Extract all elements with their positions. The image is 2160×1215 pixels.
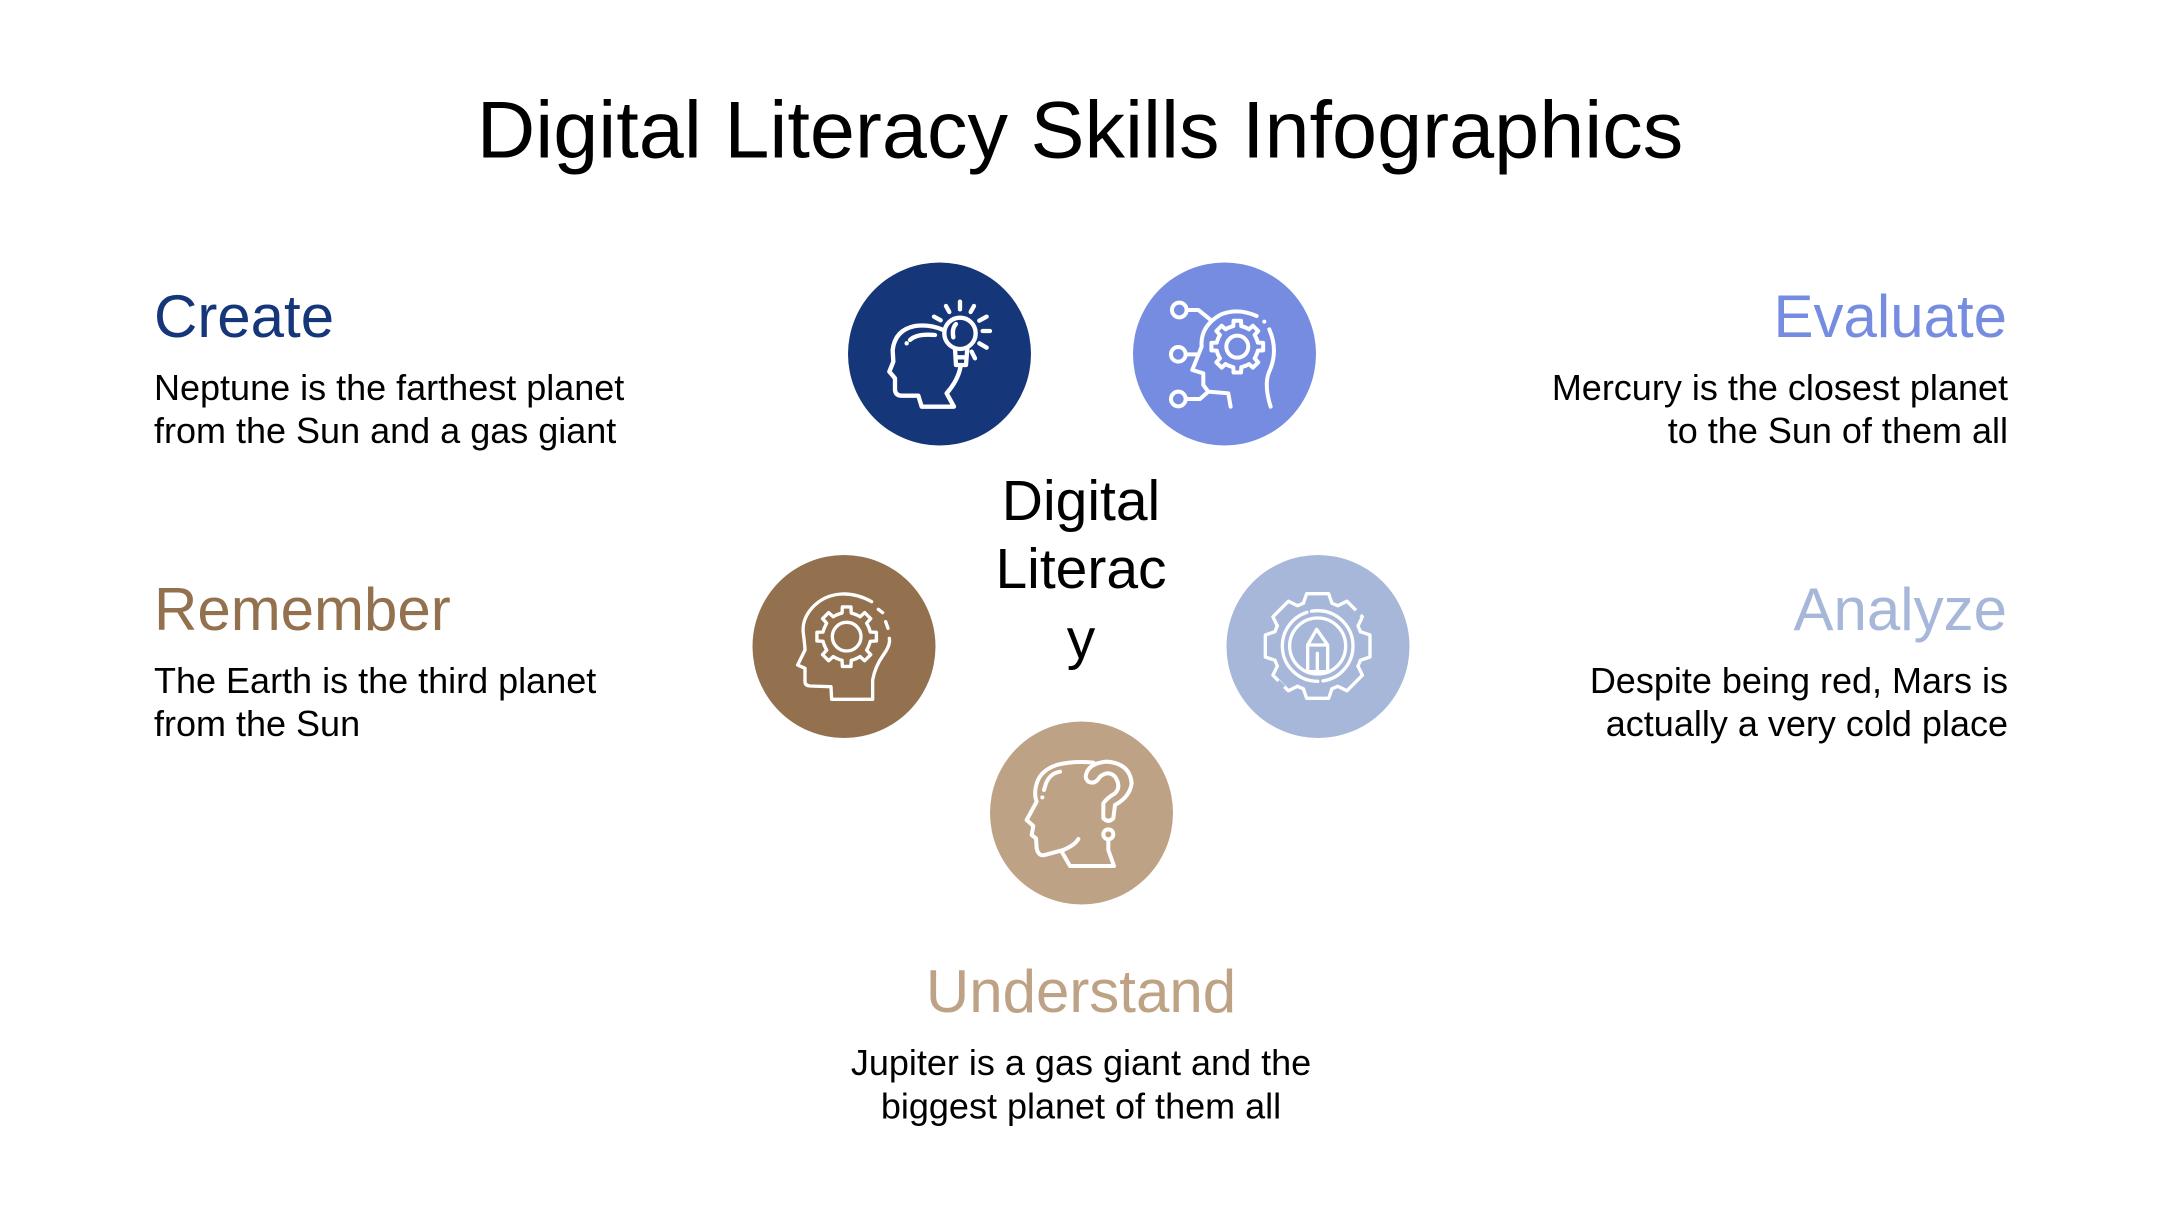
panel: remember text: The Earth is the third planet bbox=[154, 660, 596, 701]
panel: analyze text: actually a very cold place bbox=[1606, 703, 2008, 744]
panel: create text: Neptune is the farthest planet bbox=[154, 367, 624, 408]
icon: create, head with light bulb bbox=[848, 262, 1031, 446]
panel: create text: Create bbox=[154, 283, 334, 350]
panel: understand text: Understand bbox=[926, 958, 1236, 1025]
panel: evaluate text: Evaluate bbox=[1774, 283, 2007, 350]
panel: create text bbox=[154, 283, 624, 451]
panel: create text: from the Sun and a gas giant bbox=[154, 410, 616, 451]
panel: evaluate text: to the Sun of them all bbox=[1668, 410, 2008, 451]
panel: remember text bbox=[154, 576, 596, 744]
center label: y bbox=[1067, 607, 1096, 671]
panel: analyze text bbox=[1590, 576, 2008, 744]
icon: evaluate, head with gear and circuits bbox=[1133, 262, 1316, 446]
icon: analyze, gear with pencil bbox=[1226, 555, 1410, 738]
panel: analyze text: Despite being red, Mars is bbox=[1590, 660, 2008, 701]
title: Digital Literacy Skills Infographics bbox=[477, 86, 1683, 176]
panel: remember text: Remember bbox=[154, 576, 451, 643]
panel: remember text: from the Sun bbox=[154, 703, 360, 744]
panel: evaluate text bbox=[1552, 283, 2008, 451]
icon: remember, head with gear bbox=[752, 555, 936, 738]
panel: understand text bbox=[851, 958, 1311, 1126]
center label: Digital bbox=[1002, 469, 1160, 533]
panel: evaluate text: Mercury is the closest planet bbox=[1552, 367, 2008, 408]
panel: understand text: biggest planet of them all bbox=[881, 1086, 1281, 1126]
icon: understand, head with question mark bbox=[990, 722, 1173, 904]
panel: understand text: Jupiter is a gas giant and the bbox=[851, 1042, 1311, 1083]
center label: Literac bbox=[995, 537, 1167, 601]
center label bbox=[995, 469, 1167, 671]
panel: analyze text: Analyze bbox=[1794, 576, 2007, 643]
